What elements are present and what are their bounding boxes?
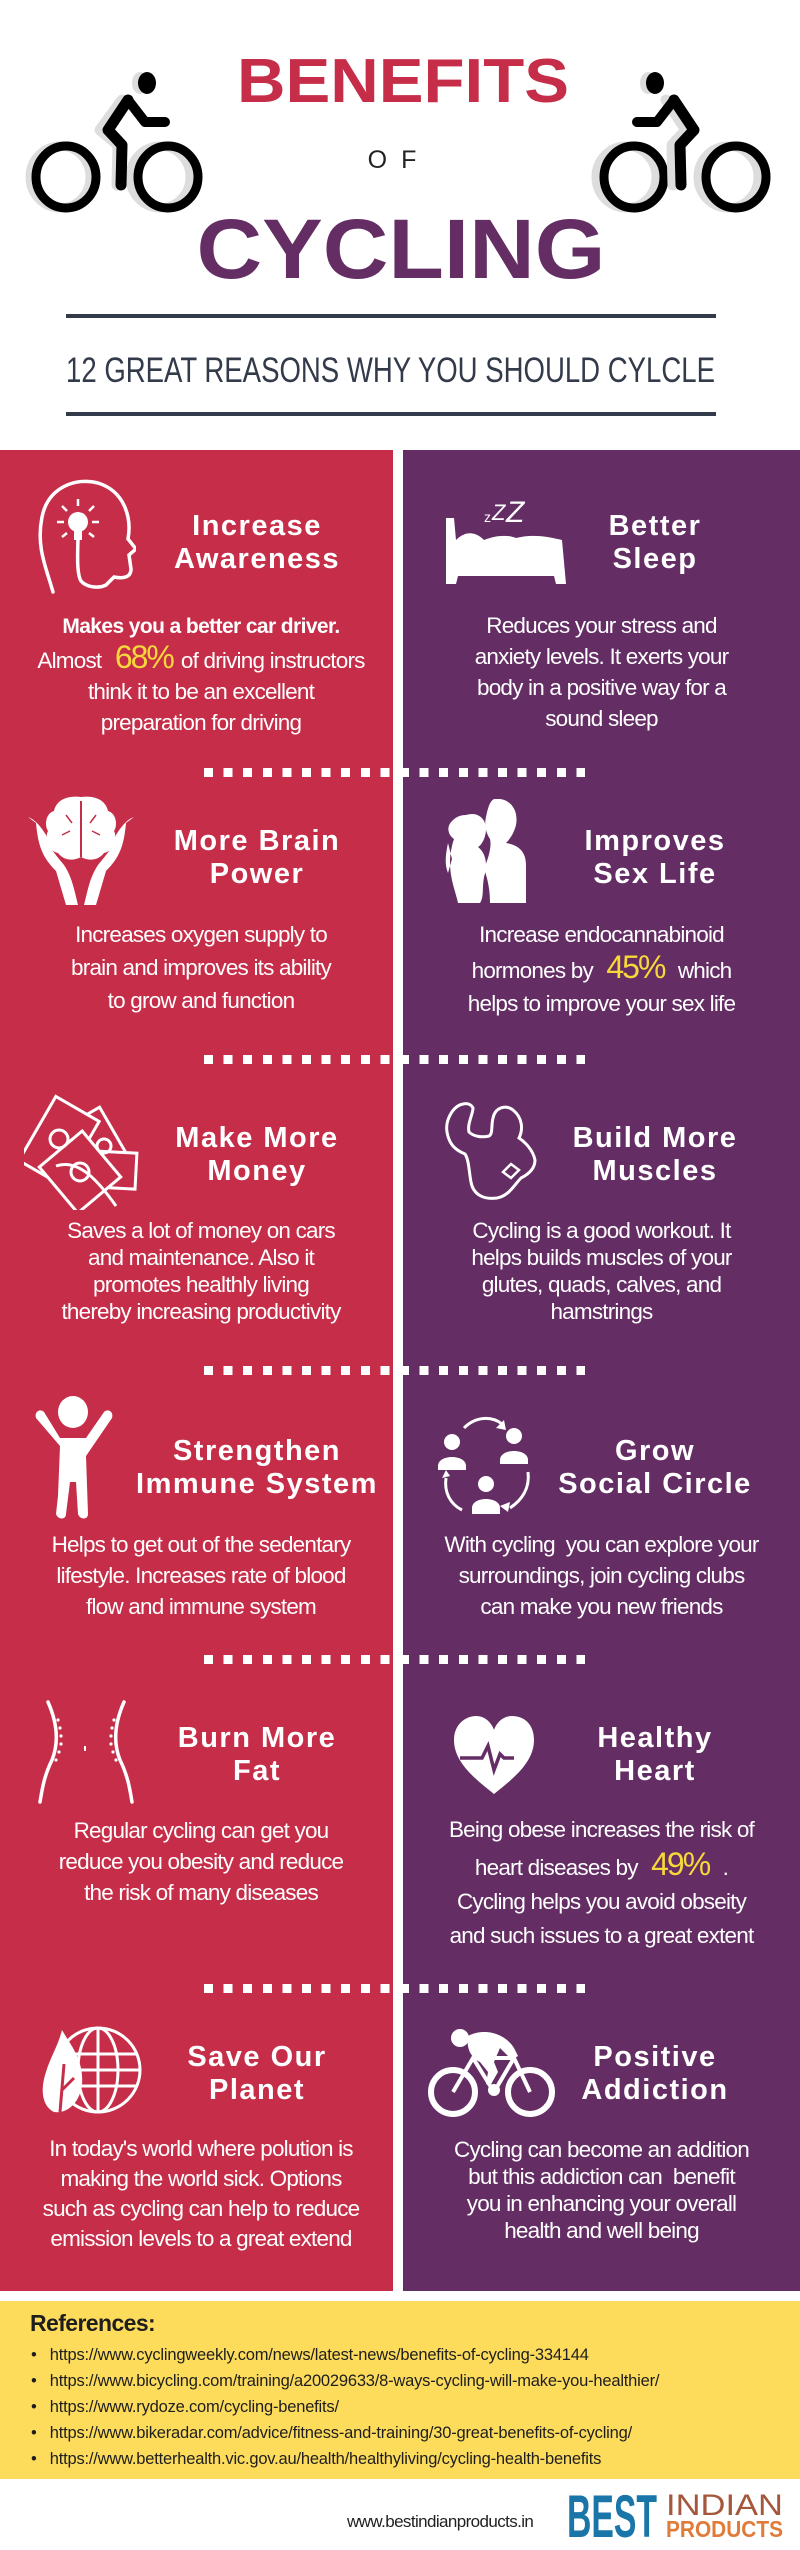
text: immune body: lifestyle. Increases rate of blood — [56, 1563, 346, 1588]
text: awareness body: think it to be an excellent — [88, 679, 314, 704]
heading: Increase Awareness: Increase — [192, 510, 322, 542]
text: muscles body: glutes, quads, calves, and — [482, 1272, 721, 1297]
icon: bed with zzz: z — [484, 509, 491, 525]
text: money body: and maintenance. Also it — [88, 1245, 314, 1270]
heading: Save Our Planet: Save Our — [187, 2041, 327, 2073]
text: addiction body: health and well being — [504, 2218, 699, 2243]
heading: More Brain Power: Power — [210, 858, 304, 890]
text: sex life body: Increase endocannabinoid — [479, 922, 724, 947]
text: addiction body — [454, 2137, 749, 2243]
text: planet body: In today's world where polution is — [49, 2136, 353, 2161]
text: reference list: • https://www.betterhealth.vic.gov.au/health/healthyliving/cycling-health-benefits — [31, 2450, 601, 2468]
heading: Healthy Heart — [597, 1722, 713, 1787]
text: reference list — [31, 2346, 660, 2468]
text: money body — [61, 1218, 342, 1324]
text: sleep body: body in a positive way for a — [477, 675, 726, 700]
title — [66, 47, 716, 416]
heading: Positive Addiction — [581, 2041, 729, 2106]
heading: Grow Social Circle: Social Circle — [558, 1468, 752, 1500]
heading: More Brain Power: More Brain — [174, 825, 340, 857]
text: muscles body: helps builds muscles of your — [471, 1245, 732, 1270]
panel: right column — [403, 450, 800, 2291]
heading: Build More Muscles: Build More — [573, 1122, 737, 1154]
title: BENEFITS — [237, 47, 569, 116]
heading: Burn More Fat: Burn More — [178, 1722, 336, 1754]
heading: Build More Muscles: Muscles — [593, 1155, 717, 1187]
heading: Grow Social Circle — [558, 1435, 752, 1500]
heading: references: References: — [30, 2310, 155, 2336]
text: social body: With cycling you can explore your — [444, 1532, 759, 1557]
heading: Save Our Planet: Planet — [209, 2074, 305, 2106]
footer: website: www.bestindianproducts.in — [347, 2512, 533, 2531]
text: sex life body — [468, 922, 735, 1016]
text: awareness body: Makes you a better car driver. — [62, 615, 340, 638]
icon: brain in hands — [28, 796, 134, 905]
text: sex life body: hormones by 45% which — [472, 949, 731, 985]
heading: Healthy Heart: Healthy — [597, 1722, 713, 1754]
heading: Make More Money — [175, 1122, 339, 1187]
heading: Strengthen Immune System: Immune System — [136, 1468, 378, 1500]
text: sex life body: helps to improve your sex life — [468, 991, 735, 1016]
icon: right bicycle — [592, 72, 770, 212]
icon: couple silhouette — [446, 799, 526, 903]
icon: bed with zzz: Z — [491, 500, 507, 525]
text: fat body: reduce you obesity and reduce — [59, 1849, 343, 1874]
text: reference list: • https://www.rydoze.com/cycling-benefits/ — [31, 2398, 339, 2416]
text: reference list: • https://www.bikeradar.com/advice/fitness-and-training/30-great-benefits-of-cycling/ — [31, 2424, 632, 2442]
text: heart body: and such issues to a great extent — [450, 1923, 753, 1948]
icon: social circle — [438, 1416, 530, 1514]
text: brain body: to grow and function — [108, 988, 294, 1013]
icon: money bills — [24, 1094, 138, 1210]
text: addiction body: Cycling can become an addition — [454, 2137, 749, 2162]
heading: Better Sleep — [609, 510, 701, 575]
heading: Improves Sex Life — [585, 825, 725, 890]
text: immune body: flow and immune system — [86, 1594, 316, 1619]
text: fat body: Regular cycling can get you — [74, 1818, 328, 1843]
text: money body: thereby increasing productivity — [61, 1299, 341, 1324]
heading: Increase Awareness: Awareness — [174, 543, 340, 575]
icon: bed with zzz — [446, 500, 566, 584]
text: fat body — [59, 1818, 343, 1905]
text: immune body: Helps to get out of the sedentary — [52, 1532, 350, 1557]
heading: Healthy Heart: Heart — [614, 1755, 696, 1787]
text: heart body: Cycling helps you avoid obseity — [457, 1889, 746, 1914]
text: awareness body — [37, 615, 365, 735]
text: fat body: the risk of many diseases — [84, 1880, 318, 1905]
heading: Better Sleep: Sleep — [613, 543, 697, 575]
icon: left bicycle — [26, 72, 202, 212]
heading: Positive Addiction: Addiction — [581, 2074, 729, 2106]
text: reference list: • https://www.cyclingweekly.com/news/latest-news/benefits-of-cycling-334144 — [31, 2346, 589, 2364]
text: planet body — [43, 2136, 360, 2251]
icon: head with lightbulb — [38, 480, 136, 594]
text: sleep body: anxiety levels. It exerts your — [475, 644, 728, 669]
heading: Increase Awareness — [174, 510, 340, 575]
text: awareness body: preparation for driving — [101, 710, 301, 735]
text: brain body: brain and improves its ability — [71, 955, 331, 980]
heading: Improves Sex Life: Improves — [585, 825, 725, 857]
text: muscles body — [471, 1218, 732, 1324]
heading: Make More Money: Money — [207, 1155, 307, 1187]
text: immune body — [52, 1532, 352, 1619]
footer: logo — [560, 2488, 790, 2543]
icon: heart with pulse — [454, 1716, 534, 1794]
text: sleep body: Reduces your stress and — [486, 613, 717, 638]
text: money body: promotes healthly living — [93, 1272, 309, 1297]
text: heart body — [449, 1817, 755, 1948]
text: money body: Saves a lot of money on cars — [67, 1218, 335, 1243]
text: sleep body — [475, 613, 729, 731]
text: planet body: making the world sick. Options — [60, 2166, 342, 2191]
heading: Strengthen Immune System — [136, 1435, 378, 1500]
heading: Strengthen Immune System: Strengthen — [173, 1435, 341, 1467]
text: reference list: • https://www.bicycling.com/training/a20029633/8-ways-cycling-will-make-you-healthier/ — [31, 2372, 659, 2390]
title: OF — [368, 146, 430, 174]
heading: Improves Sex Life: Sex Life — [593, 858, 717, 890]
heading: Save Our Planet — [187, 2041, 327, 2106]
text: social body: surroundings, join cycling clubs — [459, 1563, 744, 1588]
text: planet body: such as cycling can help to reduce — [43, 2196, 359, 2221]
text: addiction body: you in enhancing your overall — [467, 2191, 736, 2216]
text: awareness body: Almost 68% of driving instructors — [37, 639, 365, 675]
text: social body — [444, 1532, 759, 1619]
heading: Better Sleep: Better — [609, 510, 701, 542]
title: CYCLING — [196, 202, 606, 296]
text: heart body: Being obese increases the risk of — [449, 1817, 754, 1842]
heading: Grow Social Circle: Grow — [615, 1435, 695, 1467]
heading: Make More Money: Make More — [175, 1122, 339, 1154]
text: brain body: Increases oxygen supply to — [75, 922, 327, 947]
heading: Burn More Fat: Fat — [233, 1755, 281, 1787]
text: muscles body: Cycling is a good workout. It — [472, 1218, 731, 1243]
icon: globe with leaf — [42, 2026, 142, 2114]
text: addiction body: but this addiction can benefit — [468, 2164, 735, 2189]
text: brain body — [71, 922, 332, 1013]
panel: references — [0, 2301, 800, 2479]
icon: person arms raised — [36, 1396, 112, 1518]
text: social body: can make you new friends — [480, 1594, 723, 1619]
icon: cyclist — [428, 2029, 555, 2117]
heading: Positive Addiction: Positive — [593, 2041, 717, 2073]
text: sleep body: sound sleep — [545, 706, 658, 731]
icon: waist — [38, 1700, 134, 1804]
icon: muscle outline — [445, 1102, 536, 1200]
text: muscles body: hamstrings — [550, 1299, 653, 1324]
text: planet body: emission levels to a great extend — [50, 2226, 352, 2251]
heading: Build More Muscles — [573, 1122, 737, 1187]
heading: Burn More Fat — [178, 1722, 336, 1787]
footer: logo: INDIAN — [666, 2489, 783, 2522]
heading: More Brain Power — [174, 825, 340, 890]
text: heart body: heart diseases by 49% . — [475, 1846, 728, 1882]
panel: left column — [0, 450, 393, 2291]
